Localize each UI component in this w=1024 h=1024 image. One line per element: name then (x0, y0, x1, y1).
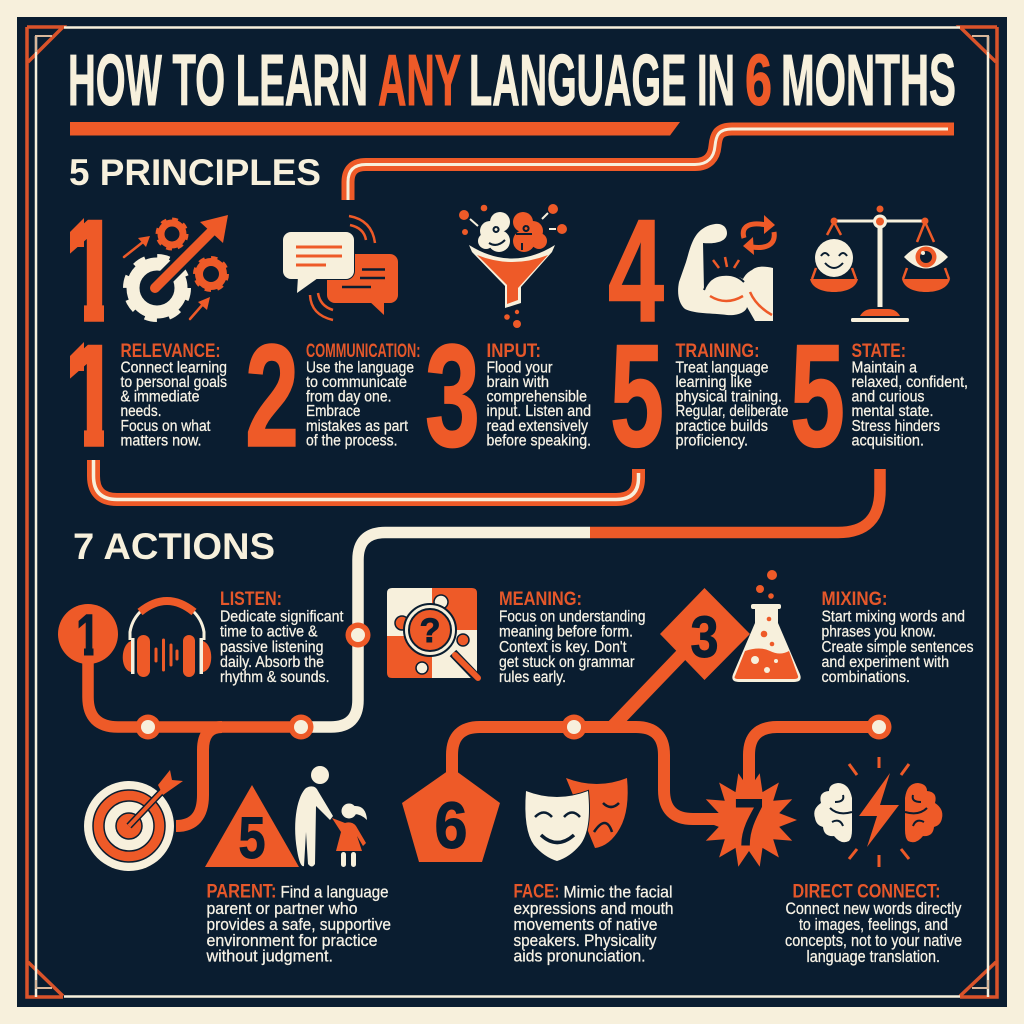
action text: listen: passive listening (220, 639, 324, 656)
icon: headphones (123, 601, 211, 677)
principle 1: relevance: needs. (120, 403, 162, 420)
action text: face (514, 880, 674, 966)
title: LANGUAGE IN (469, 41, 735, 121)
principle 5: state: acquisition. (852, 432, 924, 450)
principle 4: training: Regular, deliberate (676, 403, 788, 420)
action text: parent: provides a safe, supportive (206, 916, 391, 934)
action text: face: speakers. Physicality (514, 932, 657, 950)
principle 3: input: read extensively (486, 418, 588, 435)
principle 3: input: Flood your (486, 360, 552, 376)
principle 5: state: relaxed, confident, (852, 374, 968, 391)
principle 1: relevance: 1 (63, 314, 121, 477)
principle 3: input (425, 314, 591, 477)
action badge 6 (402, 768, 500, 862)
icon: gears and arrow (124, 215, 228, 319)
title: ANY (378, 41, 461, 121)
number 4: 4 (608, 189, 664, 352)
icon: flask (732, 570, 801, 682)
principle 5: state: mental state. (852, 403, 934, 420)
principle 4: training: 5 (610, 314, 664, 477)
principle 3: input: comprehensible (486, 388, 587, 406)
action text: face: movements of native (514, 916, 658, 934)
icon: parent and child (295, 766, 367, 867)
action text: listen: LISTEN: (220, 588, 282, 610)
principle 4: training: practice builds (676, 418, 768, 435)
action text: mixing (822, 588, 974, 686)
icon: balance scale (810, 206, 950, 322)
connector: principles bracket (94, 460, 638, 500)
action text: listen: Dedicate significant (220, 608, 344, 626)
action text: mixing: combinations. (822, 669, 910, 686)
action text: meaning (499, 588, 646, 686)
action text: listen: time to active & (220, 624, 318, 640)
action text: direct connect: Connect new words directly (786, 900, 962, 918)
action text: meaning: rules early. (499, 669, 566, 686)
title (68, 41, 956, 121)
principle 1: relevance (58, 314, 227, 477)
principle 2: communication: 2 (245, 314, 299, 477)
action text: mixing: Create simple sentences (822, 639, 974, 656)
principle 3: input: before speaking. (486, 432, 591, 450)
icon: puzzle and magnifier: ? (420, 612, 440, 650)
title: HOW TO LEARN (68, 41, 368, 121)
action text: direct connect: language translation. (806, 948, 940, 966)
connector: state to actions route (88, 469, 880, 727)
action text: mixing: Start mixing words and (822, 608, 965, 626)
principle 1: relevance: to personal goals (120, 374, 227, 391)
action badge 5: 5 (238, 806, 266, 871)
principle 4: training: physical training. (676, 388, 782, 406)
principle 2: communication: Use the language (306, 360, 414, 376)
connector: title to principles (348, 129, 954, 200)
action text: mixing: MIXING: (822, 588, 888, 610)
action text: parent: Find a language (280, 884, 388, 902)
action text: face: expressions and mouth (514, 900, 674, 918)
principle 1: relevance: Focus on what (120, 418, 211, 435)
principle 2: communication: of the process. (306, 432, 398, 450)
action text: meaning: Focus on understanding (499, 608, 646, 626)
action text: listen: rhythm & sounds. (220, 669, 330, 686)
title: 6 (745, 41, 772, 121)
action text: direct connect: concepts, not to your native (785, 932, 962, 950)
action badge 3: 3 (690, 605, 718, 670)
principle 5: state: Maintain a (852, 360, 917, 376)
action badge 1: 1 (76, 603, 100, 668)
principle 1: relevance: RELEVANCE: (120, 340, 220, 362)
action text: meaning: get stuck on grammar (499, 654, 634, 671)
action badge 7 (701, 773, 797, 867)
icon: flexed arm (678, 215, 775, 321)
action badge 7: 7 (734, 785, 764, 859)
action badge 3 (660, 588, 750, 680)
title underline bar (70, 122, 680, 136)
principle 5: state: STATE: (852, 340, 906, 362)
principle 5: state (790, 314, 968, 477)
heading: 5 principles: 5 PRINCIPLES (69, 152, 321, 193)
principle 2: communication: Embrace (306, 403, 360, 420)
number 1 (top row): 1 (63, 189, 121, 352)
principle 3: input: input. Listen and (486, 403, 591, 420)
action badge 6: 6 (434, 788, 468, 862)
connector: lower route (176, 652, 879, 826)
action badge 5 (205, 785, 299, 871)
principle 1: relevance: & immediate (120, 388, 200, 406)
action text: face: aids pronunciation. (514, 948, 646, 966)
action text: direct connect: to images, feelings, and (799, 916, 948, 934)
action text: mixing: and experiment with (822, 654, 949, 671)
action text: mixing: phrases you know. (822, 624, 936, 640)
action text: meaning: Context is key. Don't (499, 639, 627, 656)
icon: speech bubbles (283, 216, 398, 320)
action text: parent: without judgment. (206, 948, 333, 966)
icon: theatre masks (525, 778, 628, 861)
icon: brain funnel (459, 204, 567, 328)
route nodes (136, 622, 370, 740)
action badge 1 (58, 603, 118, 668)
principle 4: training: proficiency. (676, 432, 748, 450)
action text: face: Mimic the facial (564, 884, 672, 902)
route nodes lower (562, 714, 892, 740)
action text: parent: PARENT: (206, 880, 276, 902)
principle 4: training (610, 314, 788, 477)
principle 2: communication: COMMUNICATION: (306, 340, 420, 362)
icon: target (84, 770, 183, 871)
number 1 (top row) (58, 189, 122, 352)
principle 2: communication (245, 314, 420, 477)
principle 1: relevance: Connect learning (120, 360, 227, 376)
principle 5: state: Stress hinders (852, 418, 940, 435)
principle 2: communication: from day one. (306, 388, 392, 406)
principle 2: communication: mistakes as part (306, 418, 409, 435)
action text: parent (206, 880, 391, 966)
principle 3: input: brain with (486, 374, 549, 391)
action text: direct connect: DIRECT CONNECT: (792, 880, 940, 902)
action text: parent: parent or partner who (206, 900, 358, 918)
principle 1: relevance: matters now. (120, 432, 202, 450)
action text: meaning: MEANING: (499, 588, 582, 610)
principle 5: state: and curious (852, 388, 925, 406)
action text: direct connect (785, 880, 962, 966)
principle 4: training: TRAINING: (676, 340, 760, 362)
heading: 7 actions: 7 ACTIONS (73, 526, 275, 567)
action text: listen (220, 588, 344, 686)
principle 4: training: Treat language (676, 360, 768, 376)
icon: brains and lightning (814, 757, 942, 867)
action text: listen: daily. Absorb the (220, 654, 324, 671)
principle 3: input: 3 (425, 314, 480, 477)
principle 5: state: 5 (790, 314, 845, 477)
principle 4: training: learning like (676, 374, 752, 391)
action text: meaning: meaning before form. (499, 624, 633, 640)
principle 3: input: INPUT: (486, 340, 541, 362)
action text: parent: environment for practice (206, 932, 378, 950)
action text: face: FACE: (514, 880, 560, 902)
principle 2: communication: to communicate (306, 374, 407, 391)
icon: puzzle and magnifier (387, 588, 478, 679)
